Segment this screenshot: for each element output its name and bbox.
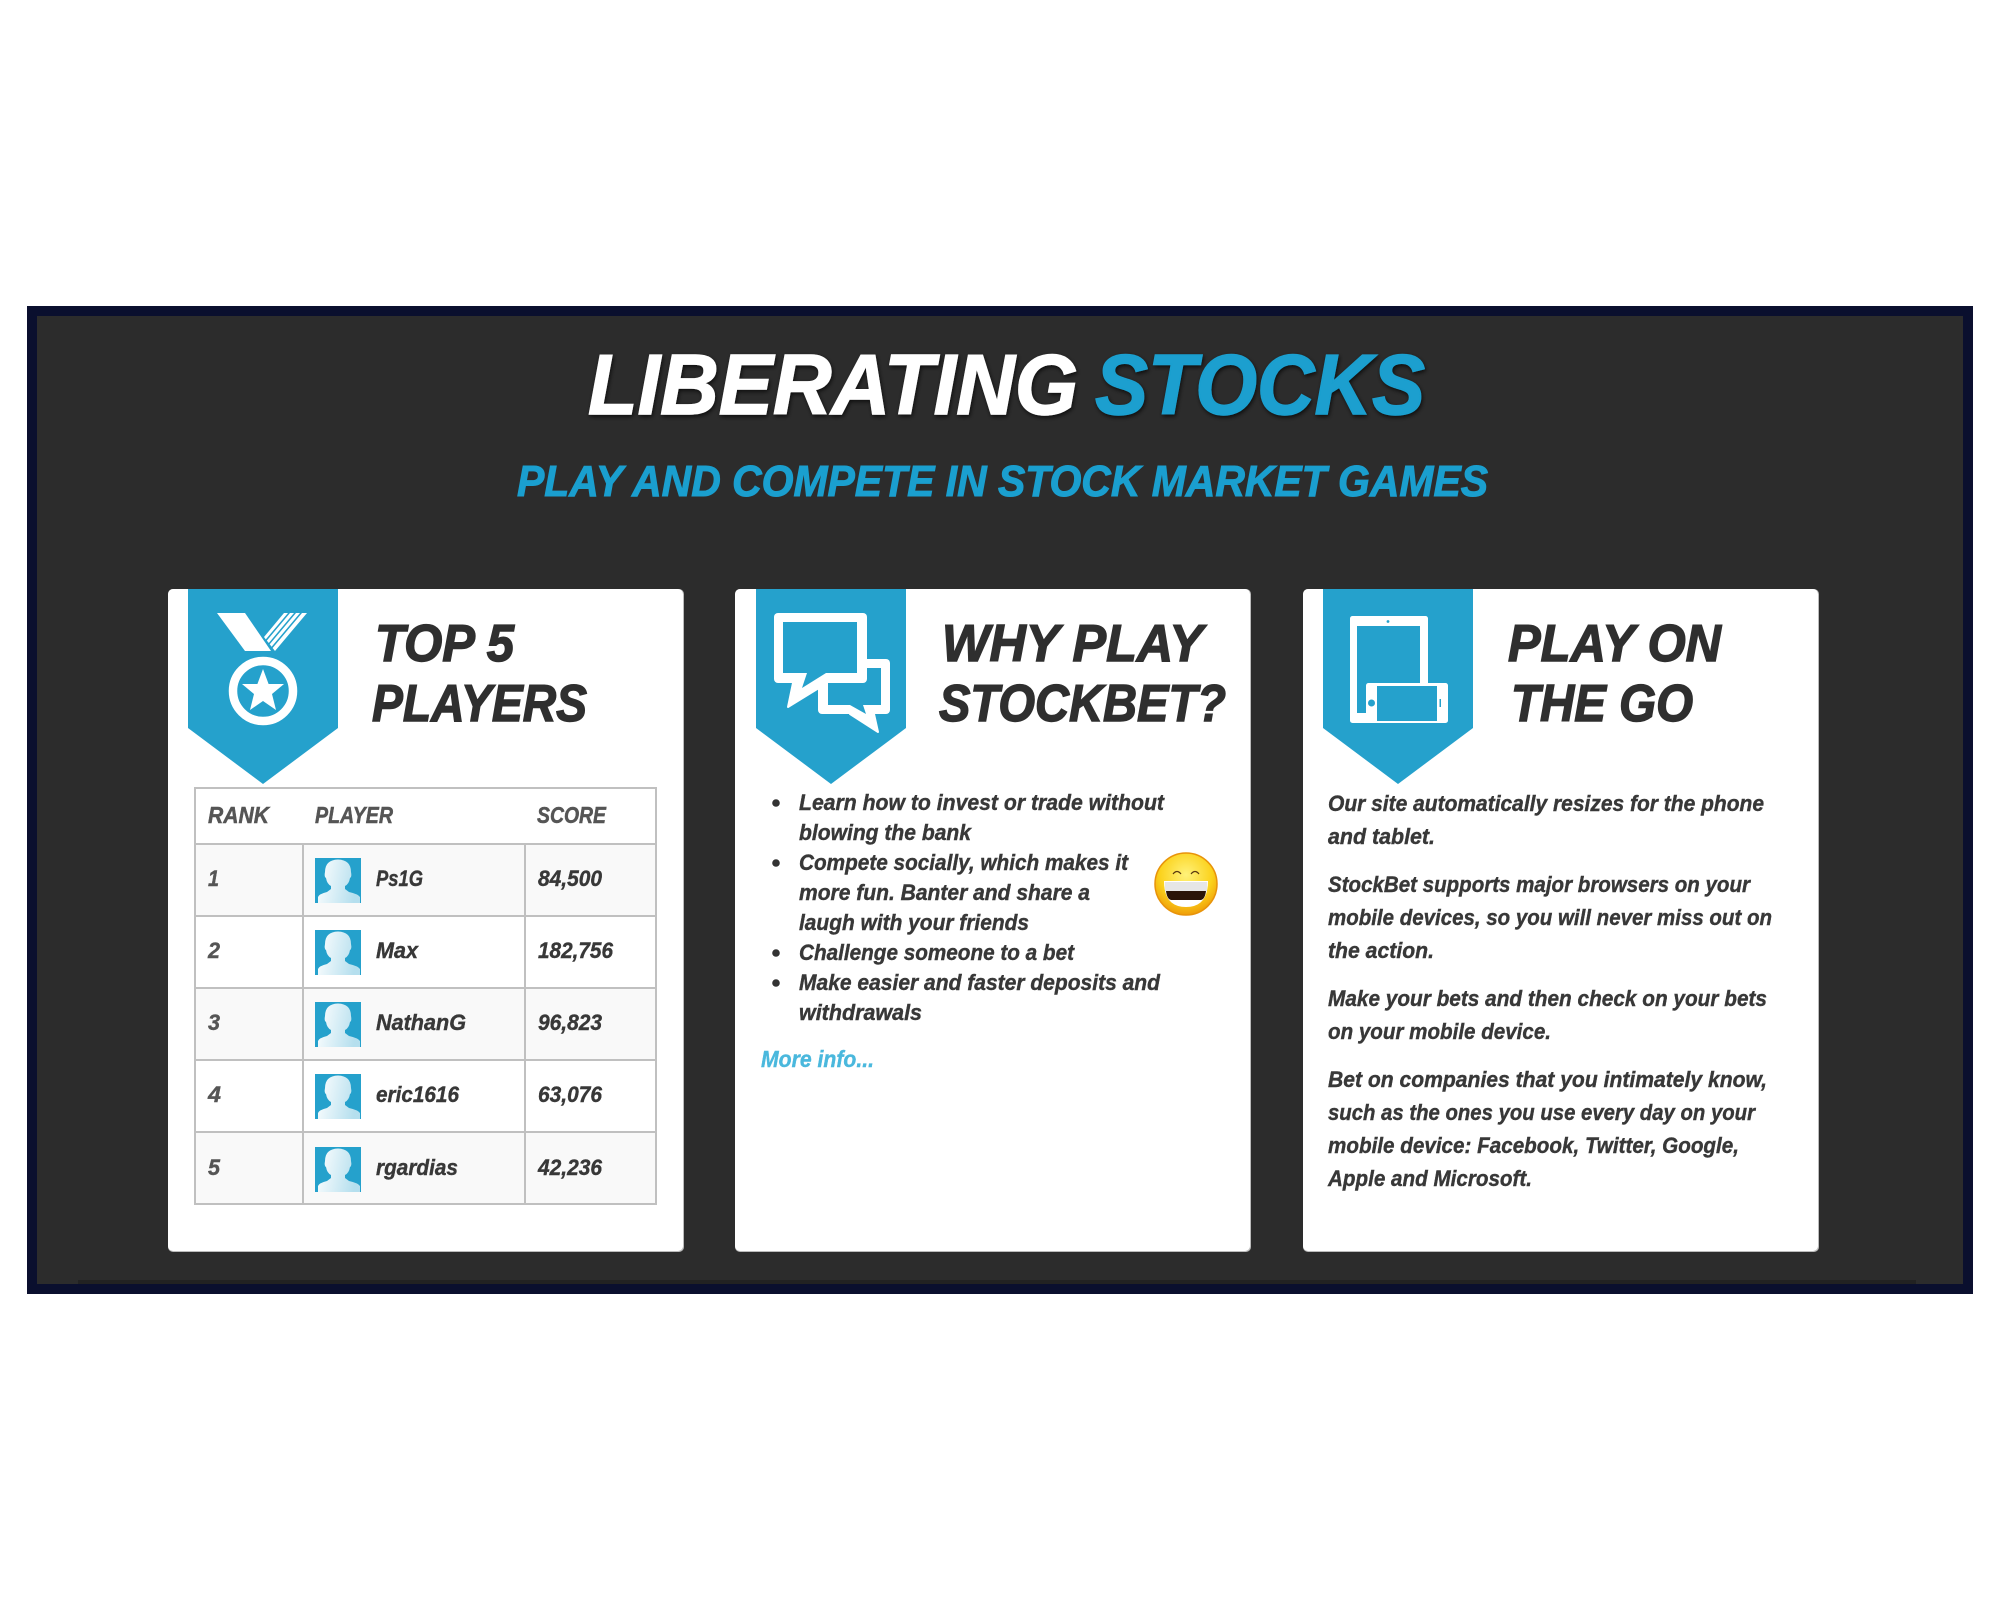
row 4: eric1616 bbox=[376, 1082, 460, 1107]
row 2: 2 bbox=[207, 938, 221, 963]
panel: why play stockbet bbox=[735, 589, 1251, 1252]
row 2: Max bbox=[376, 938, 419, 963]
bullet list: blowing the bank bbox=[799, 820, 973, 845]
bullet list: Challenge someone to a bet bbox=[799, 940, 1076, 965]
link: more info: More info... bbox=[761, 1046, 874, 1072]
dark panel with navy frame bbox=[27, 306, 1973, 1294]
heading: why play stockbet bbox=[939, 615, 1226, 733]
row 2 bbox=[207, 930, 614, 975]
bullet list bbox=[772, 790, 1166, 1025]
row 4: 4 bbox=[207, 1082, 221, 1107]
paragraph: companies bbox=[1327, 1067, 1767, 1191]
panel: top 5 players bbox=[168, 589, 684, 1252]
paragraph: browsers: the action. bbox=[1328, 938, 1434, 963]
banner: tablet and phone bbox=[1323, 589, 1473, 784]
paragraph: bets bbox=[1328, 986, 1767, 1044]
paragraph: companies: mobile device: Facebook, Twitter, Google, bbox=[1328, 1133, 1739, 1158]
paragraph: companies: Apple and Microsoft. bbox=[1327, 1166, 1532, 1191]
row 1 bbox=[208, 858, 603, 903]
heading: top 5 players: TOP 5 bbox=[375, 615, 515, 673]
table header bbox=[208, 802, 607, 828]
table header: SCORE bbox=[537, 802, 607, 828]
row 2: 182,756 bbox=[538, 938, 614, 963]
paragraph: resizes: Our site automatically resizes for the phone bbox=[1328, 791, 1764, 816]
row 4 bbox=[207, 1074, 603, 1119]
paragraph: companies: Bet on companies that you intimately know, bbox=[1328, 1067, 1767, 1092]
icon: laughing emoji bbox=[1155, 853, 1217, 915]
row 3: 3 bbox=[208, 1010, 220, 1035]
heading: top 5 players: PLAYERS bbox=[372, 675, 587, 733]
heading: why play stockbet: WHY PLAY bbox=[942, 615, 1207, 673]
bullet list: withdrawals bbox=[799, 1000, 922, 1025]
title: STOCKS bbox=[1095, 338, 1425, 433]
heading: top 5 players bbox=[372, 615, 587, 733]
row 1: Ps1G bbox=[376, 866, 423, 891]
paragraph: browsers: StockBet supports major browsers on your bbox=[1328, 872, 1751, 897]
banner: medal bbox=[188, 589, 338, 784]
paragraph: companies: such as the ones you use every day on your bbox=[1328, 1100, 1756, 1125]
title: LIBERATING bbox=[588, 338, 1078, 433]
paragraph: resizes bbox=[1328, 791, 1764, 849]
row 1: 84,500 bbox=[538, 866, 603, 891]
paragraph: browsers: mobile devices, so you will never miss out on bbox=[1328, 905, 1772, 930]
panel: play on the go bbox=[1303, 589, 1819, 1252]
row 5: 5 bbox=[208, 1155, 221, 1180]
bullet list: Learn how to invest or trade without bbox=[799, 790, 1166, 815]
bullet list: Compete socially, which makes it bbox=[799, 850, 1130, 875]
row 5: 42,236 bbox=[537, 1155, 603, 1180]
row 1: 1 bbox=[208, 866, 219, 891]
row 3: NathanG bbox=[376, 1010, 466, 1035]
row 4: 63,076 bbox=[538, 1082, 603, 1107]
table header: PLAYER bbox=[315, 802, 393, 828]
paragraph: resizes: and tablet. bbox=[1328, 824, 1435, 849]
bullet list: more fun. Banter and share a bbox=[799, 880, 1090, 905]
heading: play on the go bbox=[1508, 615, 1722, 733]
row 5 bbox=[208, 1147, 603, 1192]
bullet list: laugh with your friends bbox=[799, 910, 1029, 935]
paragraph: browsers bbox=[1328, 872, 1772, 963]
heading: why play stockbet: STOCKBET? bbox=[939, 675, 1226, 733]
banner: speech bubbles bbox=[756, 589, 906, 784]
row 5: rgardias bbox=[376, 1155, 458, 1180]
paragraph: bets: Make your bets and then check on your bets bbox=[1328, 986, 1767, 1011]
title bbox=[588, 338, 1425, 433]
paragraph: bets: on your mobile device. bbox=[1328, 1019, 1551, 1044]
table: leaderboard bbox=[195, 788, 656, 1204]
subtitle: PLAY AND COMPETE IN STOCK MARKET GAMES bbox=[517, 457, 1488, 506]
heading: play on the go: THE GO bbox=[1511, 675, 1693, 733]
row 3: 96,823 bbox=[538, 1010, 602, 1035]
bullet list: Make easier and faster deposits and bbox=[799, 970, 1161, 995]
heading: play on the go: PLAY ON bbox=[1508, 615, 1722, 673]
table header: RANK bbox=[208, 802, 270, 828]
row 3 bbox=[208, 1002, 602, 1047]
